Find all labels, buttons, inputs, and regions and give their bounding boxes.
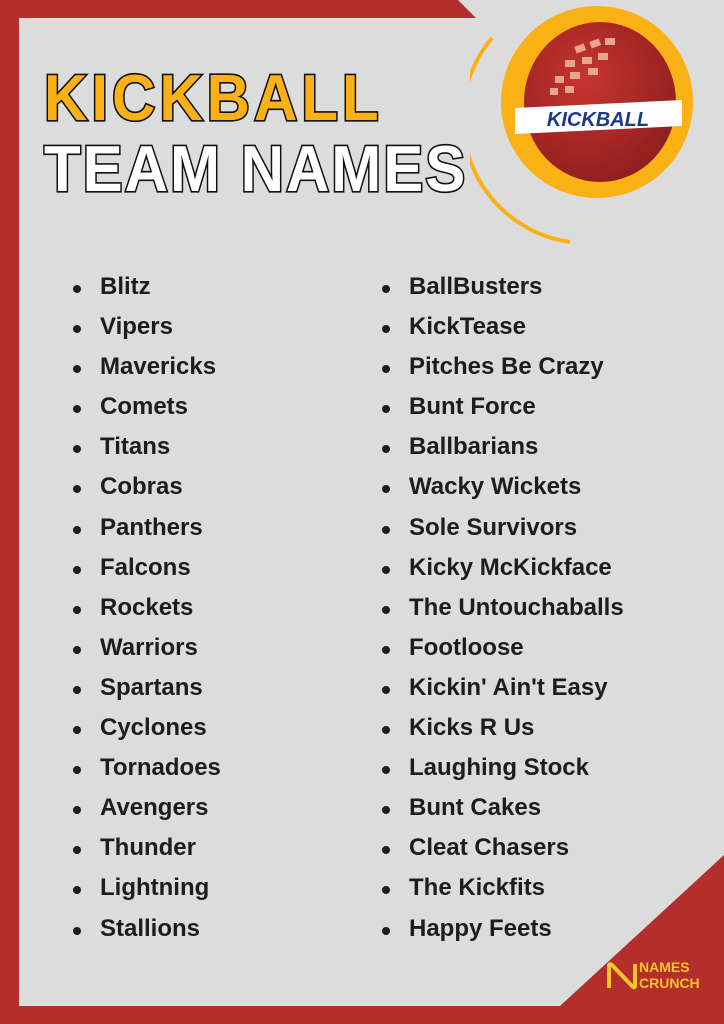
list: right column: The Untouchaballs	[409, 594, 624, 621]
list: right column: Footloose	[409, 634, 524, 661]
list: left column: Cyclones	[100, 714, 207, 741]
list: right column: Pitches Be Crazy	[409, 353, 604, 380]
list: right column	[382, 273, 624, 942]
list: right column: Bunt Cakes	[409, 794, 541, 821]
list: right column: Kickin' Ain't Easy	[409, 674, 608, 701]
list: left column: Tornadoes	[100, 754, 221, 781]
title	[43, 62, 467, 205]
list: left column: Vipers	[100, 313, 173, 340]
list: right column: Happy Feets	[409, 914, 552, 942]
logo: names crunch	[607, 959, 700, 991]
list: right column: Kicks R Us	[409, 714, 534, 741]
list: right column: Laughing Stock	[409, 754, 589, 781]
list: left column: Mavericks	[100, 353, 216, 380]
list: left column: Blitz	[100, 273, 151, 300]
list: right column: Bunt Force	[409, 393, 536, 420]
icon: kickball: KICKBALL	[547, 109, 649, 131]
list: left column: Falcons	[100, 554, 191, 581]
list: right column: Cleat Chasers	[409, 834, 569, 861]
list: left column: Cobras	[100, 473, 183, 500]
list: right column: Wacky Wickets	[409, 473, 581, 500]
list: right column: Ballbarians	[409, 433, 538, 460]
list: left column	[73, 273, 221, 942]
list: right column: BallBusters	[409, 273, 542, 300]
list: left column: Panthers	[100, 514, 203, 541]
list: left column: Thunder	[100, 834, 196, 861]
list: right column: Sole Survivors	[409, 514, 577, 541]
list: right column: KickTease	[409, 313, 526, 340]
logo: names crunch: CRUNCH	[639, 975, 700, 991]
icon: kickball	[470, 6, 693, 244]
list: left column: Rockets	[100, 594, 193, 621]
list: left column: Avengers	[100, 794, 208, 821]
list: left column: Stallions	[100, 914, 200, 942]
list: right column: Kicky McKickface	[409, 554, 612, 581]
list: left column: Lightning	[100, 874, 209, 901]
title: TEAM NAMES	[44, 133, 467, 205]
list: left column: Warriors	[100, 634, 198, 661]
list: right column: The Kickfits	[409, 874, 545, 901]
list: left column: Comets	[100, 393, 188, 420]
title: KICKBALL	[44, 62, 383, 134]
logo: names crunch: NAMES	[639, 959, 690, 975]
list: left column: Spartans	[100, 674, 203, 701]
list: left column: Titans	[100, 433, 170, 460]
